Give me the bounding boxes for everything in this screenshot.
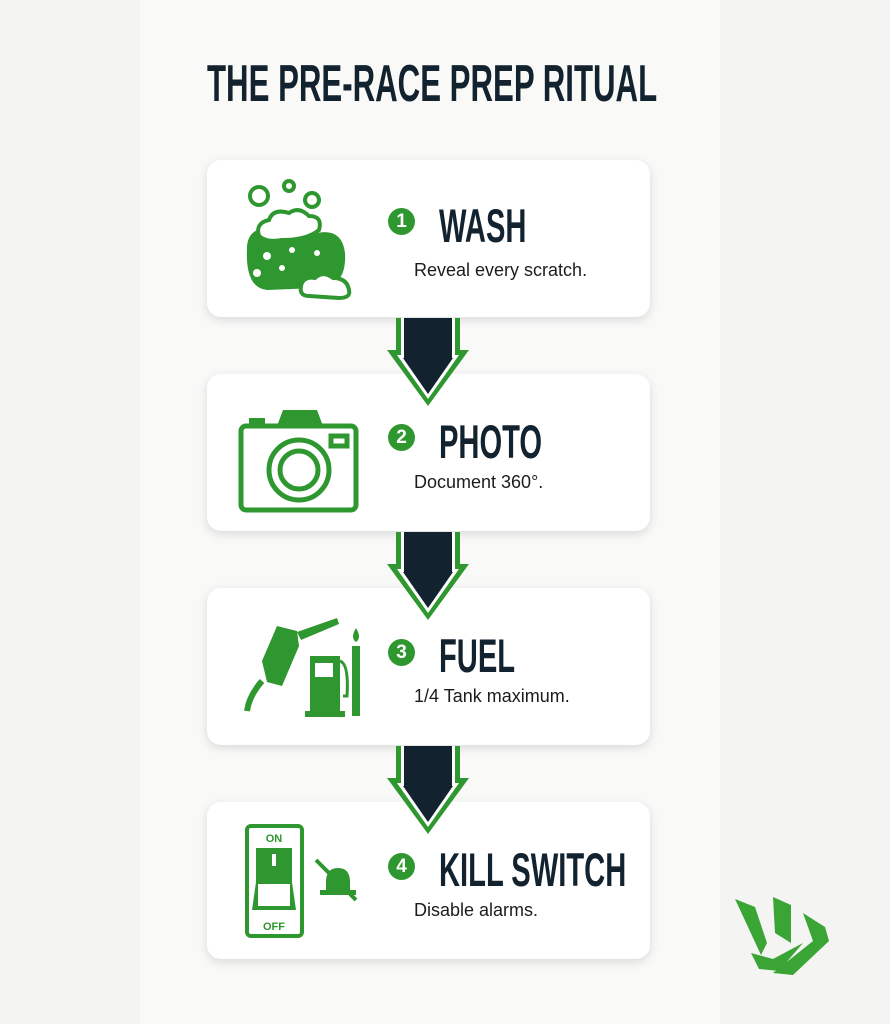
text: Disable alarms. xyxy=(414,900,538,920)
text: 1/4 Tank maximum. xyxy=(414,686,570,706)
heading: photo: PHOTO xyxy=(439,415,542,468)
card 4: kill switch xyxy=(207,802,650,959)
text: Document 360°. xyxy=(414,472,543,492)
logo xyxy=(735,897,829,975)
number 3: 3 xyxy=(396,642,407,663)
icon: fuel pump xyxy=(244,618,360,717)
icon: switch and alarm: ON xyxy=(266,833,282,845)
title: THE PRE-RACE PREP RITUAL xyxy=(207,55,657,113)
icon: switch and alarm: OFF xyxy=(263,921,285,933)
number 4 xyxy=(388,853,415,880)
text: Reveal every scratch. xyxy=(414,260,587,280)
number 2 xyxy=(388,424,415,451)
card 2: photo xyxy=(207,374,650,531)
card 3: fuel xyxy=(207,588,650,745)
icon: sponge xyxy=(246,179,352,300)
number 4: 4 xyxy=(396,856,407,877)
number 1 xyxy=(388,208,415,235)
heading: kill switch: KILL SWITCH xyxy=(439,843,626,896)
arrow 3 xyxy=(387,746,469,834)
arrow 1 xyxy=(387,318,469,406)
number 1: 1 xyxy=(396,211,407,232)
number 2: 2 xyxy=(396,427,407,448)
card 1: wash xyxy=(207,160,650,317)
arrow 2 xyxy=(387,532,469,620)
heading: fuel: FUEL xyxy=(439,629,515,682)
icon: switch and alarm xyxy=(245,824,358,938)
number 3 xyxy=(388,639,415,666)
heading: wash: WASH xyxy=(439,199,526,252)
icon: camera xyxy=(238,410,358,512)
